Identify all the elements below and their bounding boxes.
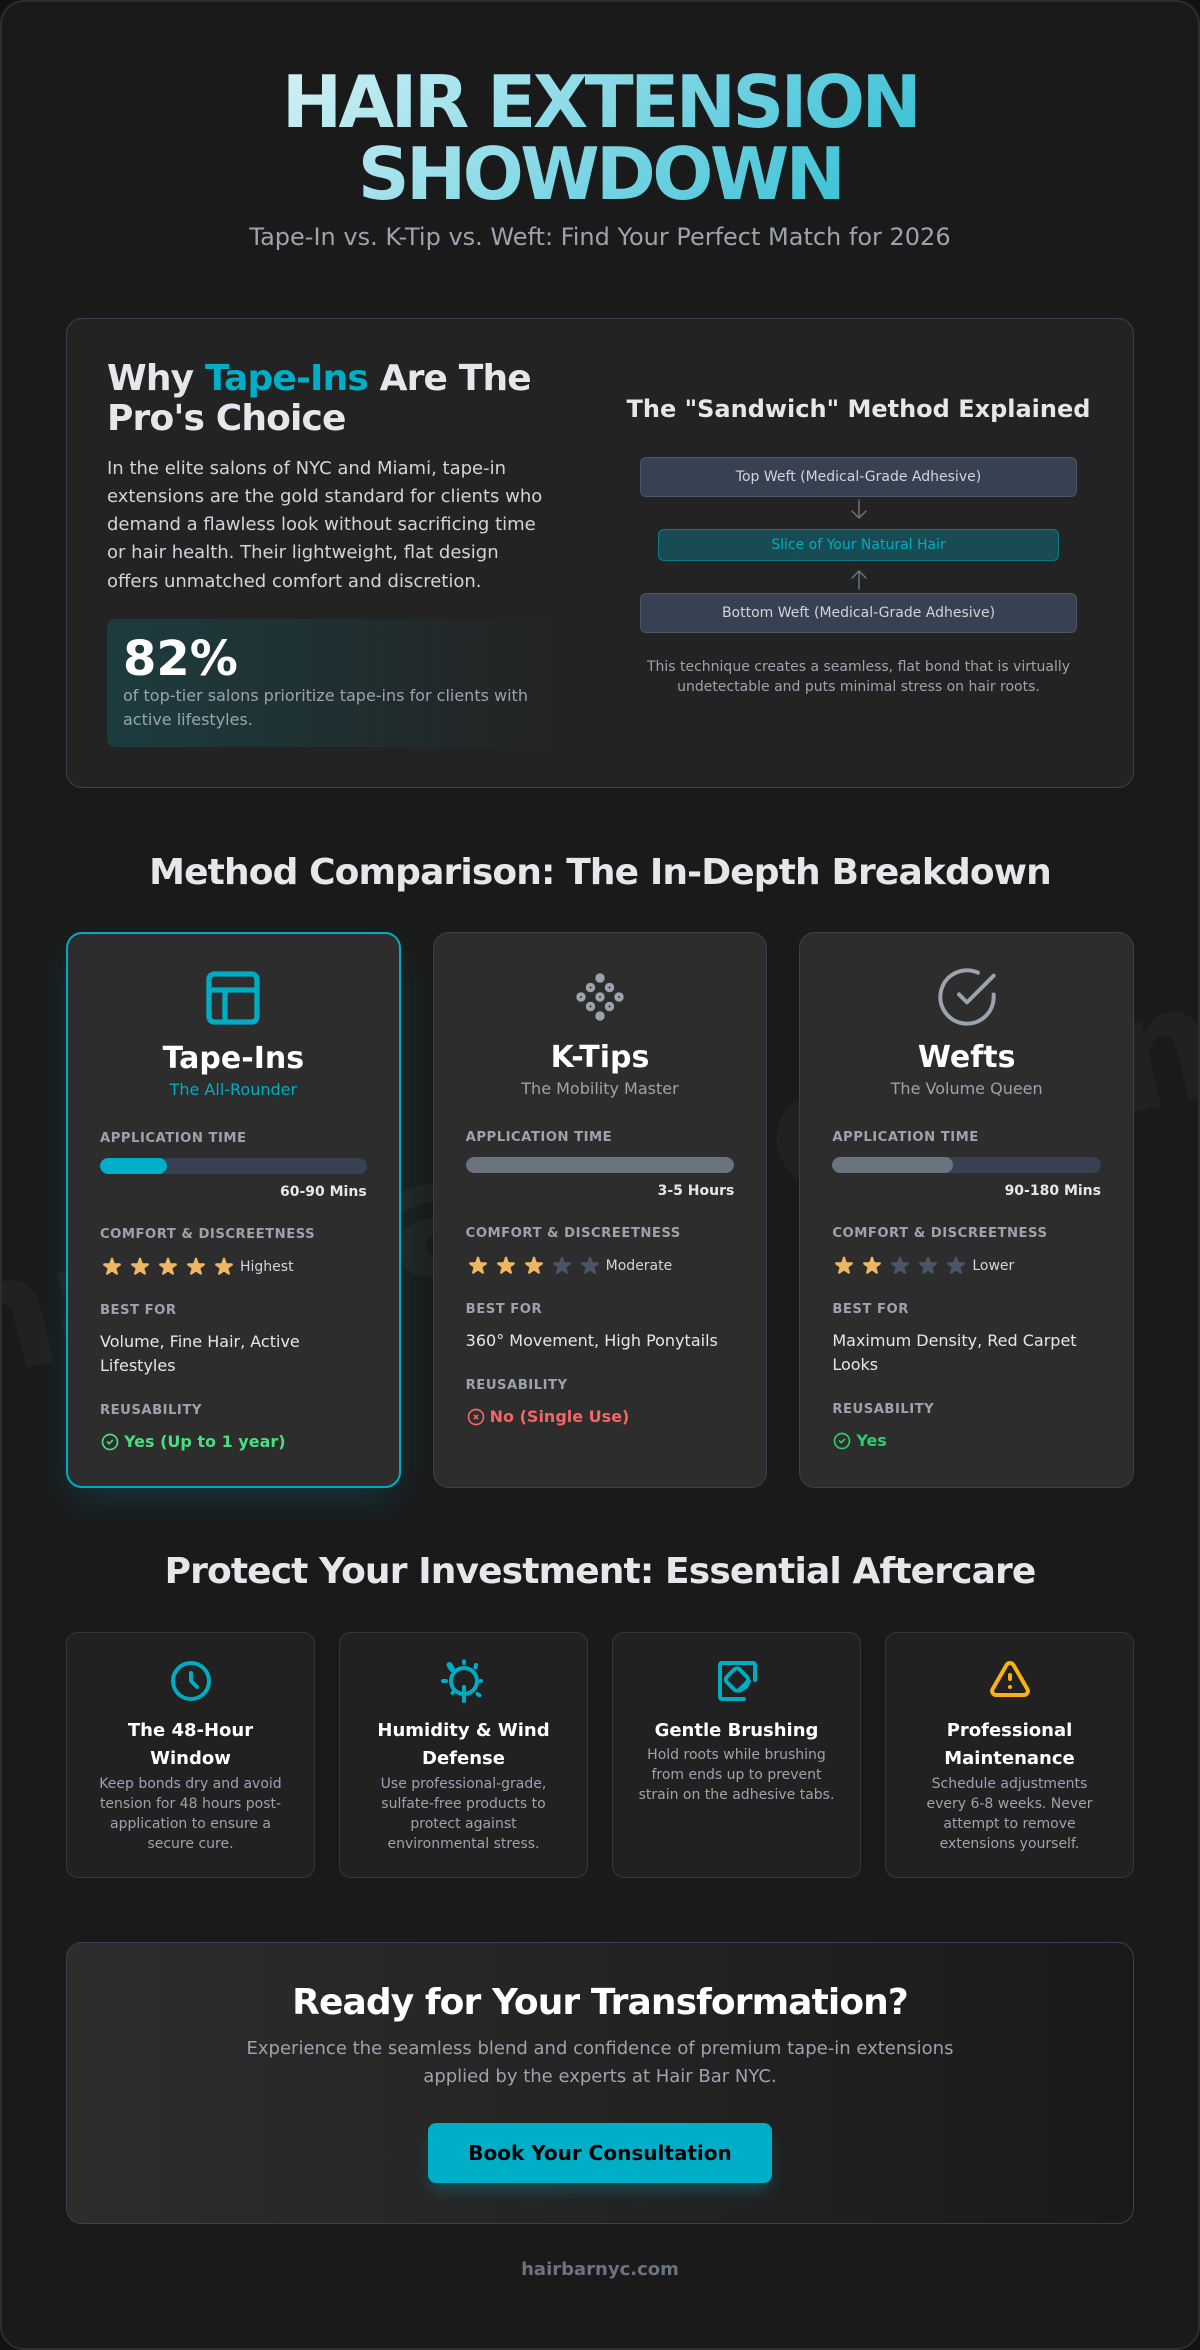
cta text [247,2038,953,2087]
callout: 82% stat: of top-tier salons prioritize tape-ins for clients with [123,686,528,704]
rating: 5 stars: Highest [240,1259,294,1275]
panel: call to action [66,1942,1134,2224]
text: why tape-ins body: extensions are the gold standard for clients who [107,486,542,507]
heading: why tape-ins [107,358,531,439]
panel: humidity and wind defense [339,1632,588,1878]
heading: why tape-ins: Pro's Choice [107,398,346,439]
icon: weft check circle [938,968,996,1026]
label: best for: BEST FOR [100,1302,177,1318]
label: application time: APPLICATION TIME [466,1130,612,1144]
cta button: Book Your Consultation [468,2141,732,2165]
care title: Professional Maintenance [944,1720,1075,1769]
value: best for: Maximum Density, Red Carpet Looks [832,1331,1077,1374]
heading: why tape-ins: Why Tape-Ins Are The [107,358,531,399]
value: reusability yes: Yes [856,1430,887,1450]
cta button [428,2123,772,2183]
text: sandwich caption: undetectable and puts minimal stress on hair roots. [677,679,1040,695]
icon: brush tab [718,1661,757,1701]
heading: sandwich method: The "Sandwich" Method Explained [627,395,1090,423]
card tagline: The Mobility Master [521,1078,679,1098]
bar: application time [832,1157,1101,1173]
bar: application time [100,1158,367,1174]
label: comfort: COMFORT & DISCREETNESS [466,1226,681,1240]
value: reusability yes [834,1430,887,1450]
text: why tape-ins body: In the elite salons of NYC and Miami, tape-in [107,458,506,479]
card name: K-Tips [551,1040,649,1075]
panel: why tape-ins [66,318,1134,788]
value: application time: 60-90 Mins [280,1184,367,1200]
heading: essential aftercare: Protect Your Investment: Essential Aftercare [165,1551,1035,1592]
icon: clock [171,1661,211,1701]
panel: professional maintenance [885,1632,1134,1878]
care text: Schedule adjustments every 6-8 weeks. Never attempt to remove extensions yourself. [926,1776,1093,1852]
title: SHOWDOWN [358,132,842,216]
care title: The 48-Hour Window [128,1720,253,1769]
card tagline: The Volume Queen [891,1078,1043,1098]
text: sandwich caption [646,659,1070,695]
card name: Wefts [918,1040,1015,1075]
callout: 82% stat: active lifestyles. [123,710,253,728]
diagram block: top weft: Top Weft (Medical-Grade Adhesive) [736,469,981,485]
bar: application time [466,1157,734,1173]
title: HAIR EXTENSION [282,60,918,144]
diagram block: top weft [640,457,1077,497]
title [66,66,1134,210]
diagram block: bottom weft: Bottom Weft (Medical-Grade Adhesive) [722,605,995,621]
care title: Gentle Brushing [655,1720,818,1741]
heading: method comparison: Method Comparison: The In-Depth Breakdown [149,852,1051,892]
icon: tape-in layout [206,971,260,1025]
rating: 5 stars [103,1258,294,1275]
icon: warning triangle [990,1661,1030,1697]
care text: Use professional-grade, sulfate-free products to protect against environmental stress. [381,1776,546,1852]
card name: Tape-Ins [163,1041,304,1076]
icon: k-tip dots [576,973,624,1021]
text: why tape-ins body: demand a flawless look without sacrificing time [107,514,536,535]
rating: 3 stars [469,1256,672,1274]
panel: k-tips card [433,932,767,1488]
care text: Hold roots while brushing from ends up to prevent strain on the adhesive tabs. [639,1747,834,1803]
panel: 48-hour window [66,1632,315,1878]
label: comfort: COMFORT & DISCREETNESS [832,1226,1047,1240]
value: best for: Volume, Fine Hair, Active Lifestyles [100,1332,300,1375]
text: why tape-ins body: offers unmatched comfort and discretion. [107,571,482,592]
value: reusability yes: Yes (Up to 1 year) [124,1432,286,1450]
card tagline: The All-Rounder [170,1080,297,1098]
label: reusability: REUSABILITY [832,1402,934,1416]
label: reusability: REUSABILITY [100,1402,202,1418]
label: comfort: COMFORT & DISCREETNESS [100,1226,315,1242]
arrow: down [851,499,867,519]
cta text: applied by the experts at Hair Bar NYC. [423,2066,777,2087]
care text: Keep bonds dry and avoid tension for 48 hours post-application to ensure a secure cure. [99,1776,282,1852]
callout: 82% stat: 82% [123,631,238,687]
arrow: up [851,570,867,590]
rating: 3 stars: Moderate [606,1258,672,1274]
panel: gentle brushing [612,1632,861,1878]
subtitle: Tape-In vs. K-Tip vs. Weft: Find Your Perfect Match for 2026 [249,223,951,251]
cta text: Experience the seamless blend and confidence of premium tape-in extensions [247,2038,953,2059]
footer url: hairbarnyc.com [521,2259,679,2280]
rating: 2 stars: Lower [972,1258,1014,1274]
text: sandwich caption: This technique creates a seamless, flat bond that is virtually [647,659,1070,675]
label: application time: APPLICATION TIME [832,1130,979,1144]
callout: 82% stat [107,619,557,747]
care title: Humidity & Wind Defense [377,1720,550,1769]
panel: tape-ins card [66,932,401,1488]
label: best for: BEST FOR [466,1302,542,1316]
panel: wefts card [799,932,1134,1488]
cta heading: Ready for Your Transformation? [292,1982,908,2023]
label: application time: APPLICATION TIME [100,1130,246,1146]
value: reusability no: No (Single Use) [490,1406,629,1426]
rating: 2 stars [835,1256,1014,1274]
diagram block: natural hair: Slice of Your Natural Hair [771,537,946,553]
value: application time: 90-180 Mins [1005,1183,1101,1199]
value: application time: 3-5 Hours [658,1183,734,1199]
value: best for: 360° Movement, High Ponytails [466,1331,718,1350]
icon: sun and humidity [441,1659,483,1703]
diagram block: bottom weft [640,593,1077,633]
text: why tape-ins body [107,458,542,592]
label: best for: BEST FOR [832,1302,909,1316]
text: why tape-ins body: or hair health. Their lightweight, flat design [107,542,499,563]
label: reusability: REUSABILITY [466,1378,568,1392]
diagram block: natural hair [658,529,1059,561]
